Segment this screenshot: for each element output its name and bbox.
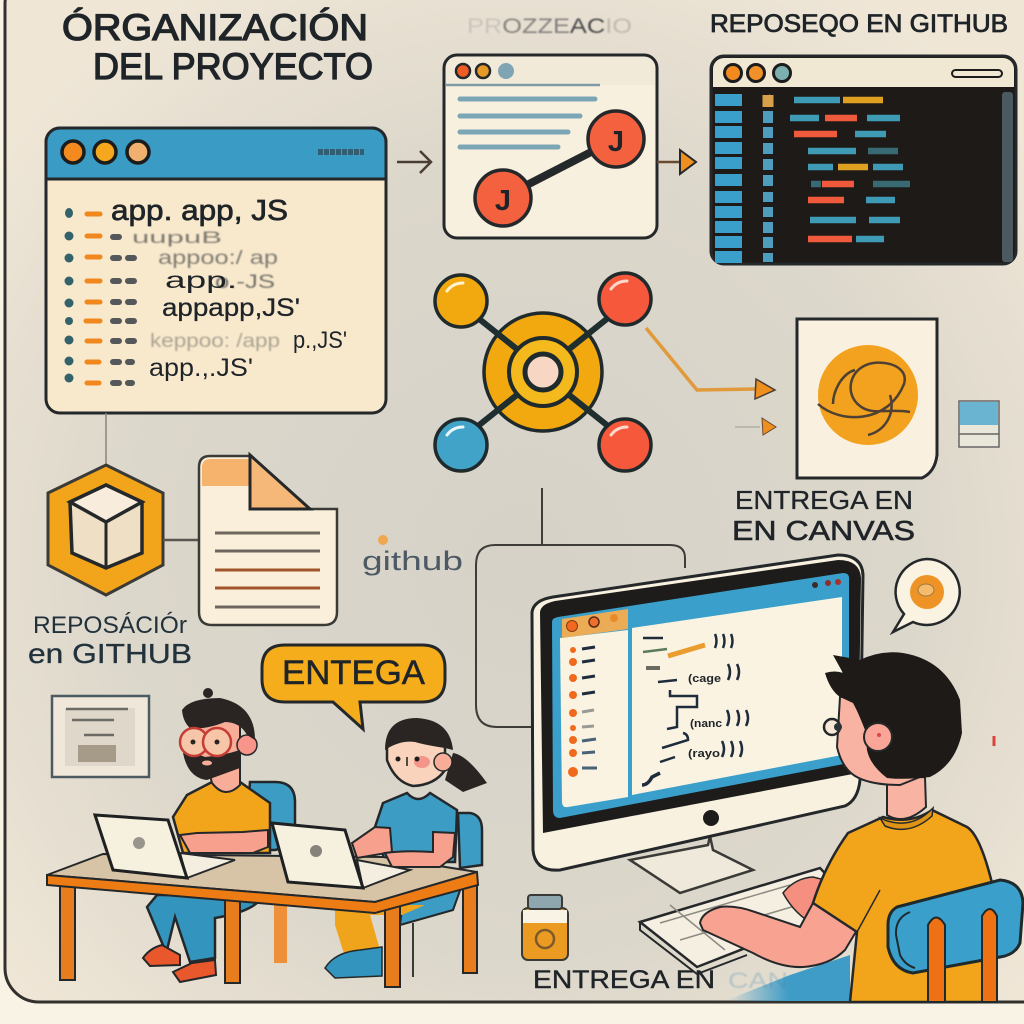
panel: process window — [444, 55, 657, 238]
speech bubble: entrega: ENTEGA — [282, 654, 425, 692]
arrow: small orange pointer — [735, 418, 776, 435]
chair: man — [245, 782, 295, 850]
icon: wall picture — [52, 696, 149, 777]
chair: woman — [458, 813, 482, 868]
label: github: github — [362, 546, 463, 576]
code lines — [642, 634, 748, 785]
label: bottom delivery: CAN — [728, 968, 788, 993]
label: repository in github: en GITHUB — [28, 638, 192, 669]
label: canvas delivery: EN CANVAS — [732, 515, 915, 546]
node J bottom — [475, 170, 531, 226]
label: bottom delivery — [533, 966, 788, 994]
small code text: (rayo — [688, 748, 720, 760]
chair — [888, 880, 1023, 1002]
small code text: (cage — [688, 673, 721, 685]
file list: appoo:/ ap — [158, 248, 278, 269]
diagram: central hub with nodes — [435, 273, 651, 471]
file list: app. — [165, 267, 237, 293]
heading: github repository: REPOSEQO EN GITHUB — [710, 10, 1008, 38]
title: DEL PROYECTO — [93, 46, 373, 87]
file list: keppoo: /app — [150, 331, 280, 352]
node: top left — [435, 275, 487, 327]
icon: document — [199, 455, 337, 625]
woman torso — [375, 793, 457, 862]
man shoe right — [173, 960, 216, 982]
label: github — [362, 535, 463, 576]
file list: appapp,JS' — [162, 294, 300, 322]
file list — [64, 195, 347, 383]
small code text — [688, 673, 722, 760]
file list: app. app, JS — [111, 195, 288, 227]
node J top: J — [608, 126, 624, 158]
title: ÓRGANIZACIÓN — [62, 7, 368, 48]
far hand — [783, 877, 825, 925]
head — [824, 652, 962, 819]
illustration: large monitor — [532, 555, 863, 893]
connector: file window to hexagon — [105, 413, 107, 465]
arm and hand — [700, 903, 860, 967]
woman arms — [352, 827, 455, 867]
table — [47, 854, 478, 987]
node: top right — [599, 273, 651, 325]
sidebar lines — [568, 647, 597, 777]
speech bubble: idea — [893, 559, 960, 632]
laptop left — [95, 815, 235, 878]
woman legs — [335, 905, 425, 957]
label: repository in github — [28, 612, 192, 669]
small code text: (nanc — [690, 718, 722, 730]
code lines — [790, 100, 910, 239]
label: canvas delivery: ENTREGA EN — [735, 485, 913, 515]
connector: hexagon to document — [163, 539, 198, 541]
label: repository in github: REPOSÁCIÓr — [33, 612, 187, 639]
arrow: process to repository — [657, 150, 696, 174]
arrow: file window to process — [397, 151, 431, 173]
node J top — [588, 111, 644, 167]
woman head — [385, 718, 487, 792]
man head — [180, 688, 257, 792]
man legs — [147, 895, 260, 962]
label: bottom delivery: ENTREGA EN — [533, 966, 715, 994]
panel: canvas page — [797, 319, 937, 478]
node: bottom left — [435, 419, 487, 471]
file list: o.-JS — [215, 272, 275, 293]
panel: code repository window — [711, 56, 1016, 264]
panel: project file window — [46, 128, 386, 413]
title — [62, 7, 373, 87]
file list: app.,.JS' — [149, 354, 253, 382]
file list: p.,JS' — [293, 327, 347, 354]
arrow: hub to canvas — [646, 328, 775, 399]
man arms — [180, 830, 268, 853]
connector: bracket to monitor — [476, 488, 685, 727]
icon: package hexagon — [48, 465, 163, 595]
icon: small repo card — [959, 387, 999, 447]
man shoe left — [143, 945, 180, 966]
laptop right — [272, 823, 410, 888]
illustration: two people at a table — [47, 688, 487, 987]
woman shoe — [325, 947, 382, 978]
soft blue patch — [727, 955, 850, 1001]
node: bottom right — [599, 419, 651, 471]
illustration: person at monitor — [640, 652, 1023, 1002]
icon: jar — [522, 895, 568, 960]
man torso — [173, 782, 270, 853]
keyboard — [640, 868, 855, 974]
node J bottom: J — [495, 185, 511, 217]
torso — [813, 810, 992, 1002]
label: canvas delivery — [732, 485, 915, 546]
file list: uupuB — [132, 228, 222, 247]
speech bubble: entrega — [262, 645, 445, 729]
mark: small red exclamation — [992, 736, 996, 746]
heading: faded process: PR OZZE AC IO — [467, 15, 632, 38]
